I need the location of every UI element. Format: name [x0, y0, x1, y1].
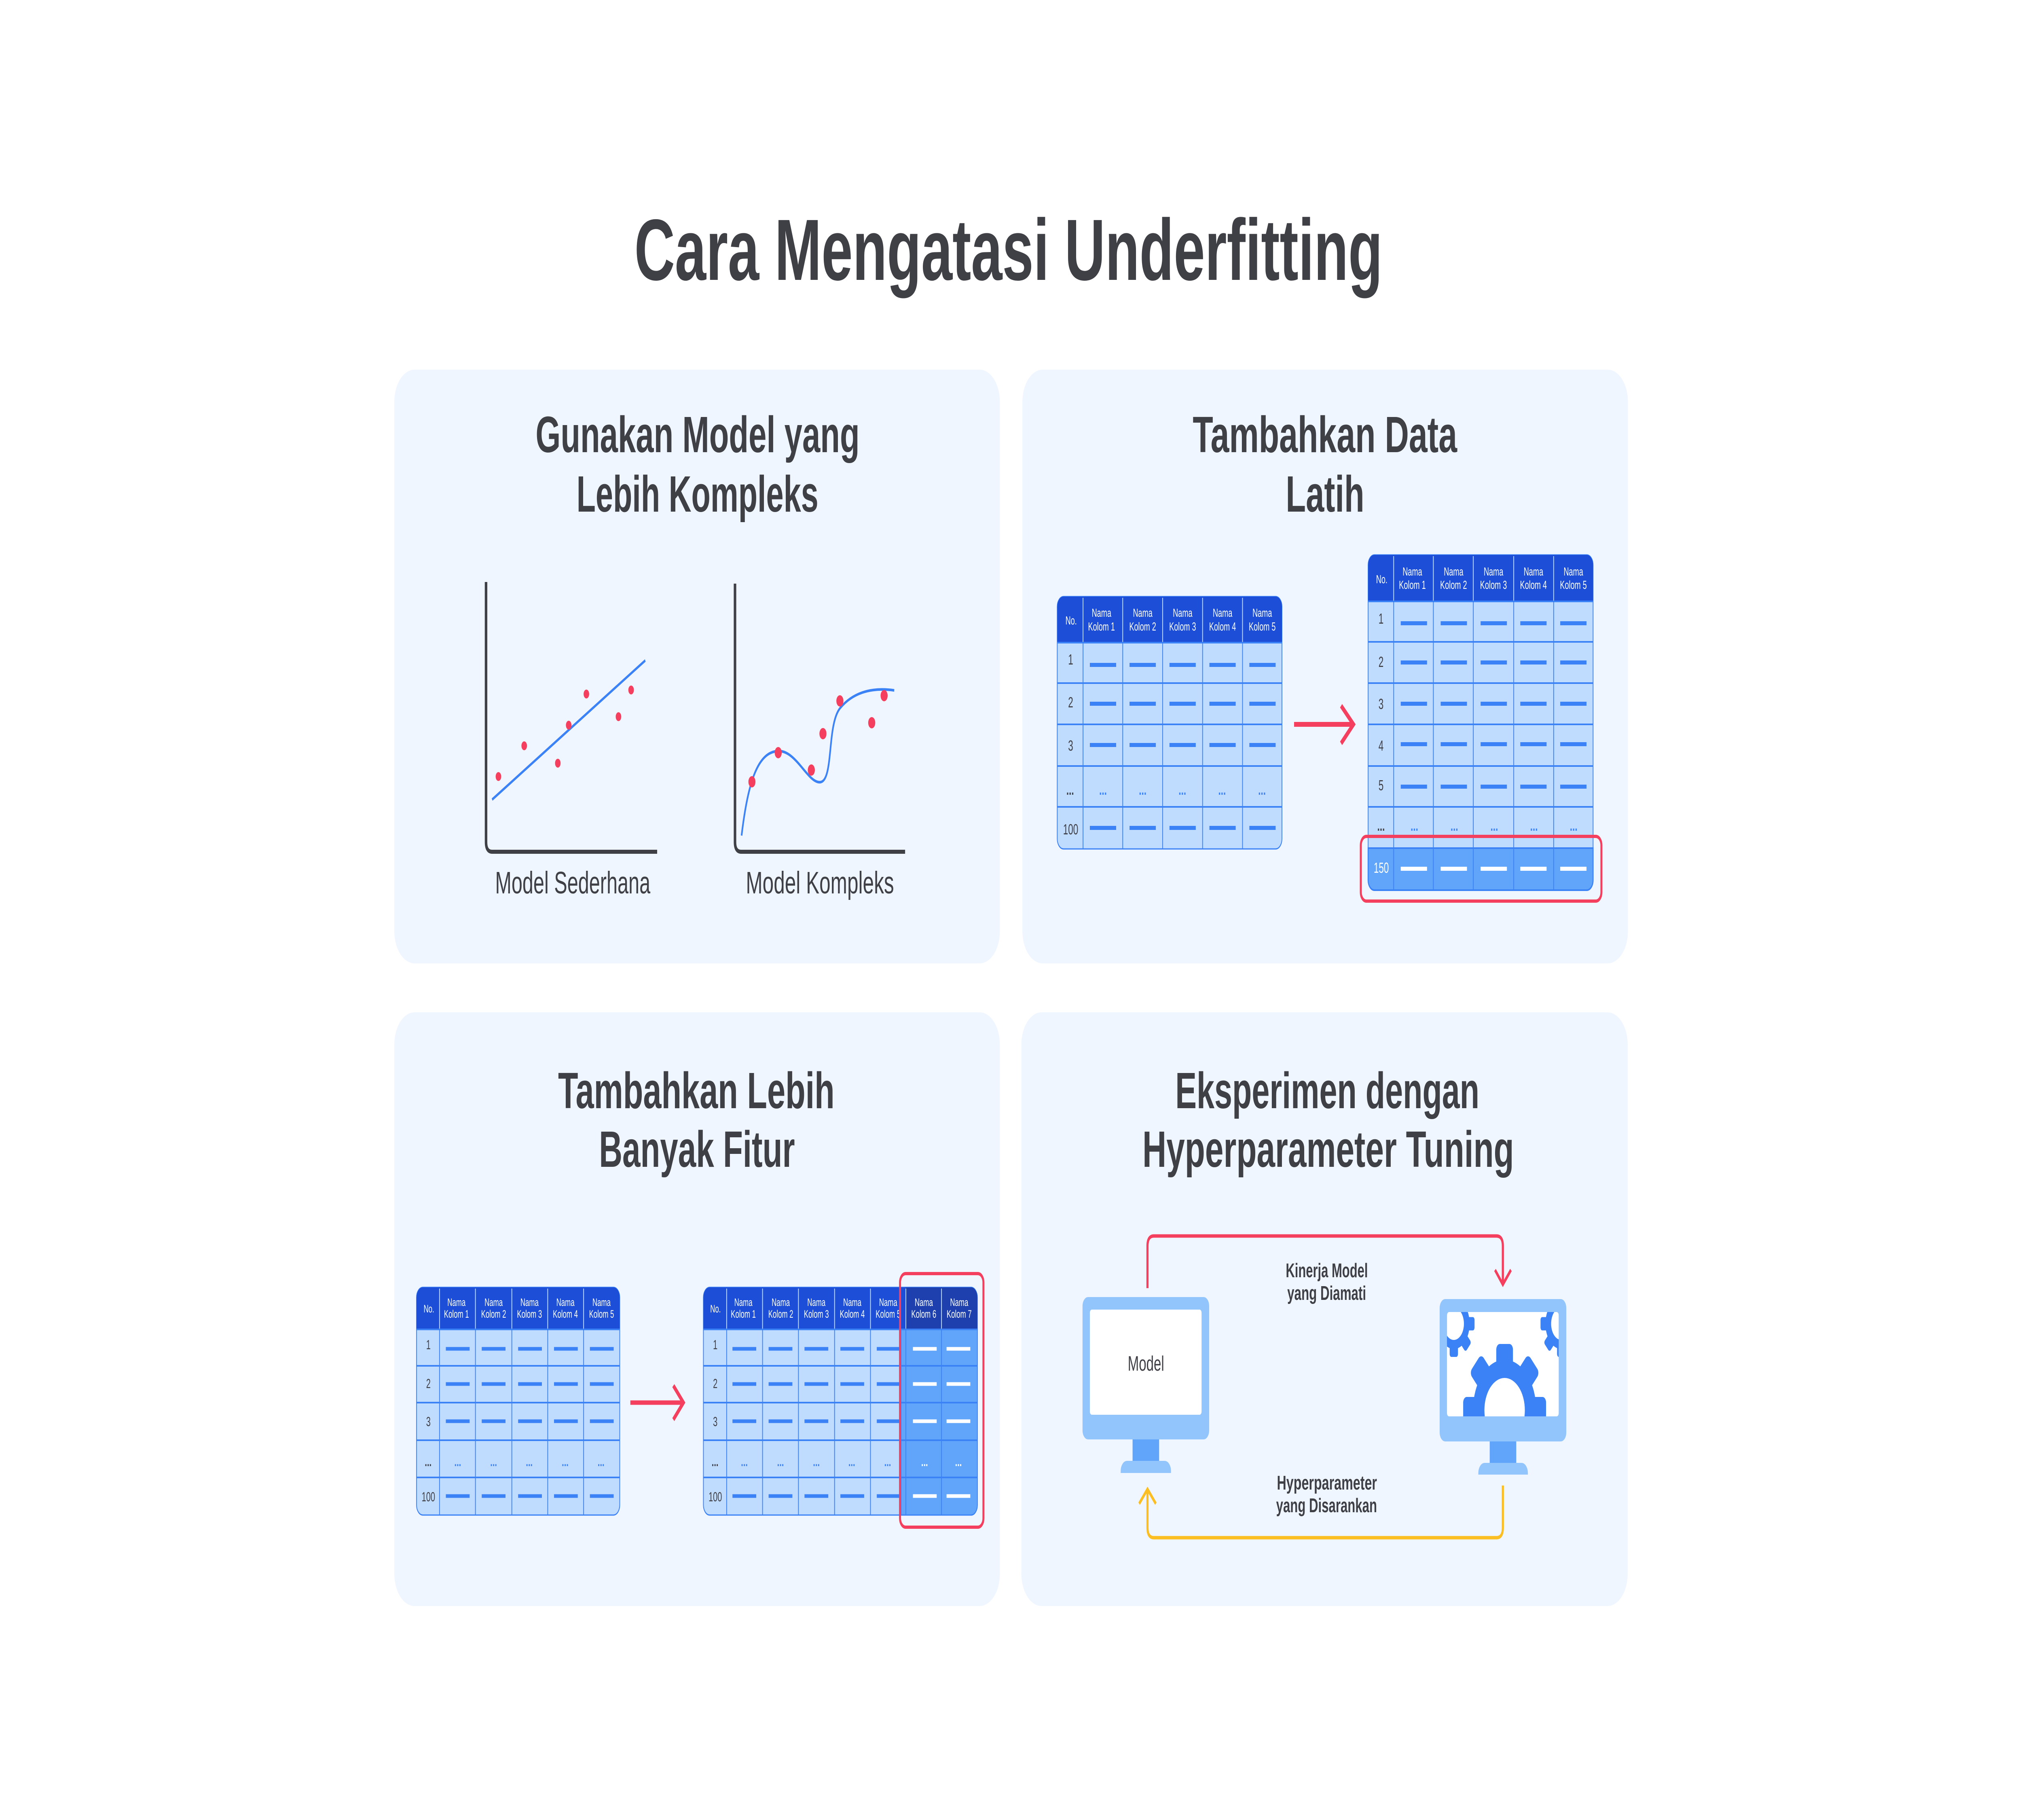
table: 150 rows: Nama — [1444, 565, 1464, 578]
icon: model monitor — [1083, 1297, 1209, 1473]
label: hyperparameter — [1276, 1472, 1377, 1517]
icon: tuning monitor with gears — [1440, 1299, 1567, 1475]
table: 100 rows — [1057, 597, 1282, 849]
table: 100 rows: 1 — [1068, 652, 1073, 668]
table: 7 columns — [703, 1287, 977, 1515]
table: 7 columns: Nama — [879, 1296, 897, 1308]
table: 5 columns: ... — [562, 1454, 569, 1469]
table: 7 columns: Kolom 4 — [840, 1308, 865, 1320]
table: 150 rows: ... — [1570, 818, 1578, 834]
highlighted new columns — [901, 1329, 977, 1515]
table: 5 columns: Kolom 1 — [444, 1308, 469, 1320]
icon: model monitor: Model — [1128, 1352, 1164, 1376]
table: 150 rows: Kolom 2 — [1440, 579, 1467, 592]
table: 7 columns: ... — [848, 1454, 855, 1469]
table: 150 rows: ... — [1451, 818, 1458, 834]
table: 150 rows: ... — [1377, 818, 1385, 834]
table: 100 rows: Kolom 2 — [1129, 620, 1156, 633]
table: 5 columns: 3 — [426, 1414, 431, 1429]
table: 7 columns: ... — [777, 1454, 784, 1469]
heading: eksperimen: Eksperimen dengan — [1175, 1062, 1479, 1120]
table: 5 columns: 1 — [426, 1337, 431, 1352]
table: 5 columns: ... — [526, 1454, 533, 1469]
table: 7 columns: Kolom 3 — [804, 1308, 829, 1320]
table: 5 columns: No. — [424, 1303, 434, 1315]
label: kinerja model: Kinerja Model — [1286, 1259, 1368, 1282]
table: 7 columns: ... — [813, 1454, 820, 1469]
highlight box: new columns — [900, 1274, 984, 1527]
table: 5 columns: 2 — [426, 1376, 431, 1391]
table: 100 rows: 2 — [1068, 695, 1073, 711]
heading: gunakan model: Gunakan Model yang — [535, 406, 860, 463]
table: 7 columns: ... — [741, 1454, 748, 1469]
table: 150 rows: Kolom 1 — [1399, 579, 1426, 592]
title: Cara Mengatasi Underfitting — [635, 201, 1383, 298]
arrow: more columns — [630, 1386, 683, 1420]
table: 150 rows: No. — [1376, 573, 1387, 586]
table: 150 rows: 3 — [1379, 696, 1383, 712]
table: 100 rows: Nama — [1173, 607, 1193, 620]
table: 5 columns: 100 — [422, 1490, 435, 1504]
arrow: hyperparameter — [1139, 1486, 1503, 1538]
table: 100 rows: ... — [1066, 782, 1074, 798]
table: 7 columns: Kolom 2 — [768, 1308, 793, 1320]
table: 150 rows: Kolom 5 — [1560, 579, 1587, 592]
table: 7 columns: Nama — [807, 1296, 826, 1308]
table: 100 rows: Nama — [1092, 607, 1111, 620]
table: 7 columns: 1 — [713, 1337, 717, 1352]
table: 100 rows: ... — [1178, 782, 1186, 798]
table: 5 columns: ... — [455, 1454, 461, 1469]
label: kinerja model — [1286, 1259, 1368, 1304]
table: 100 rows: ... — [1218, 782, 1226, 798]
table: 5 columns: Nama — [447, 1296, 466, 1308]
table: 7 columns: 100 — [709, 1490, 722, 1504]
table: 100 rows: 3 — [1068, 738, 1073, 754]
table: 7 columns: 2 — [713, 1376, 717, 1391]
heading: tambahkan lebih: Tambahkan Lebih — [558, 1062, 835, 1120]
highlighted row 150 — [1368, 848, 1593, 890]
table: 7 columns: Nama — [734, 1296, 753, 1308]
table: 100 rows: Kolom 4 — [1209, 620, 1236, 633]
label: kinerja model: yang Diamati — [1287, 1282, 1366, 1304]
panel: tambahkan data latih — [1022, 370, 1628, 963]
table: 150 rows — [1368, 555, 1593, 890]
heading: tambahkan data — [1193, 406, 1457, 523]
table: 150 rows: ... — [1411, 818, 1418, 834]
panel: eksperimen hyperparameter tuning — [1022, 1012, 1628, 1606]
table: 100 rows: ... — [1099, 782, 1107, 798]
table: 7 columns: No. — [710, 1303, 721, 1315]
table: 5 columns: Kolom 4 — [553, 1308, 578, 1320]
table: 7 columns: Kolom 1 — [731, 1308, 756, 1320]
table: 5 columns: ... — [598, 1454, 605, 1469]
heading: tambahkan lebih: Banyak Fitur — [599, 1121, 795, 1178]
heading: tambahkan data: Latih — [1286, 466, 1364, 523]
table: 7 columns: Kolom 7 — [947, 1308, 972, 1320]
panel: tambahkan lebih banyak fitur — [394, 1012, 1000, 1606]
highlight box: new rows — [1361, 836, 1601, 901]
table: 5 columns: Nama — [520, 1296, 539, 1308]
table: 7 columns: 3 — [713, 1414, 717, 1429]
table: 7 columns: Kolom 6 — [911, 1308, 936, 1320]
table: 150 rows: Kolom 4 — [1520, 579, 1547, 592]
label: hyperparameter: yang Disarankan — [1276, 1494, 1377, 1517]
table: 5 columns: Nama — [556, 1296, 575, 1308]
table: 100 rows: ... — [1139, 782, 1146, 798]
heading: tambahkan lebih — [558, 1062, 835, 1178]
table: 7 columns: Nama — [915, 1296, 933, 1308]
table: 150 rows: ... — [1530, 818, 1538, 834]
table: 100 rows: Kolom 3 — [1169, 620, 1196, 633]
table: 5 columns: Nama — [484, 1296, 503, 1308]
panel: gunakan model yang lebih kompleks — [394, 370, 1000, 963]
heading: gunakan model — [535, 406, 860, 523]
heading: eksperimen — [1142, 1062, 1514, 1178]
table: 150 rows: ... — [1491, 818, 1498, 834]
chart: model sederhana — [486, 582, 657, 852]
table: 150 rows: 4 — [1379, 738, 1383, 754]
table: 5 columns — [417, 1287, 620, 1515]
heading: tambahkan data: Tambahkan Data — [1193, 406, 1457, 463]
table: 150 rows: Nama — [1402, 565, 1422, 578]
infographic canvas — [394, 217, 1628, 1606]
table: 7 columns: ... — [884, 1454, 891, 1469]
table: 5 columns: Kolom 3 — [517, 1308, 542, 1320]
table: 7 columns: ... — [712, 1454, 718, 1469]
table: 150 rows: 150 — [1374, 860, 1389, 876]
chart: model kompleks — [735, 584, 905, 852]
table: 150 rows: Nama — [1563, 565, 1583, 578]
heading: eksperimen: Hyperparameter Tuning — [1142, 1121, 1514, 1178]
table: 5 columns: ... — [425, 1454, 431, 1469]
label: model sederhana: Model Sederhana — [495, 865, 650, 900]
heading: gunakan model: Lebih Kompleks — [577, 466, 819, 523]
table: 100 rows: Kolom 1 — [1088, 620, 1115, 633]
table: 150 rows: 2 — [1379, 654, 1383, 670]
table: 5 columns: Kolom 2 — [481, 1308, 506, 1320]
arrow: kinerja model — [1148, 1236, 1511, 1288]
table: 7 columns: ... — [921, 1454, 928, 1469]
label: model kompleks: Model Kompleks — [746, 865, 894, 900]
table: 100 rows: No. — [1066, 614, 1077, 627]
table: 150 rows: 1 — [1379, 611, 1383, 627]
table: 150 rows: Nama — [1524, 565, 1543, 578]
table: 5 columns: Kolom 5 — [589, 1308, 614, 1320]
table: 7 columns: ... — [955, 1454, 962, 1469]
label: hyperparameter: Hyperparameter — [1277, 1472, 1377, 1494]
table: 5 columns: Nama — [592, 1296, 611, 1308]
table: 100 rows: Nama — [1133, 607, 1153, 620]
table: 100 rows: ... — [1258, 782, 1266, 798]
table: 100 rows: Nama — [1252, 607, 1272, 620]
table: 7 columns: Nama — [843, 1296, 861, 1308]
arrow: table grows — [1294, 706, 1354, 743]
table: 150 rows: 5 — [1379, 778, 1383, 794]
table: 7 columns: Nama — [950, 1296, 969, 1308]
table: 100 rows: Nama — [1213, 607, 1233, 620]
table: 5 columns: ... — [490, 1454, 497, 1469]
table: 100 rows: 100 — [1063, 822, 1078, 838]
table: 7 columns: Kolom 5 — [876, 1308, 901, 1320]
table: 150 rows: Nama — [1484, 565, 1504, 578]
table: 100 rows: Kolom 5 — [1249, 620, 1275, 633]
table: 150 rows: Kolom 3 — [1480, 579, 1507, 592]
table: 7 columns: Nama — [772, 1296, 790, 1308]
